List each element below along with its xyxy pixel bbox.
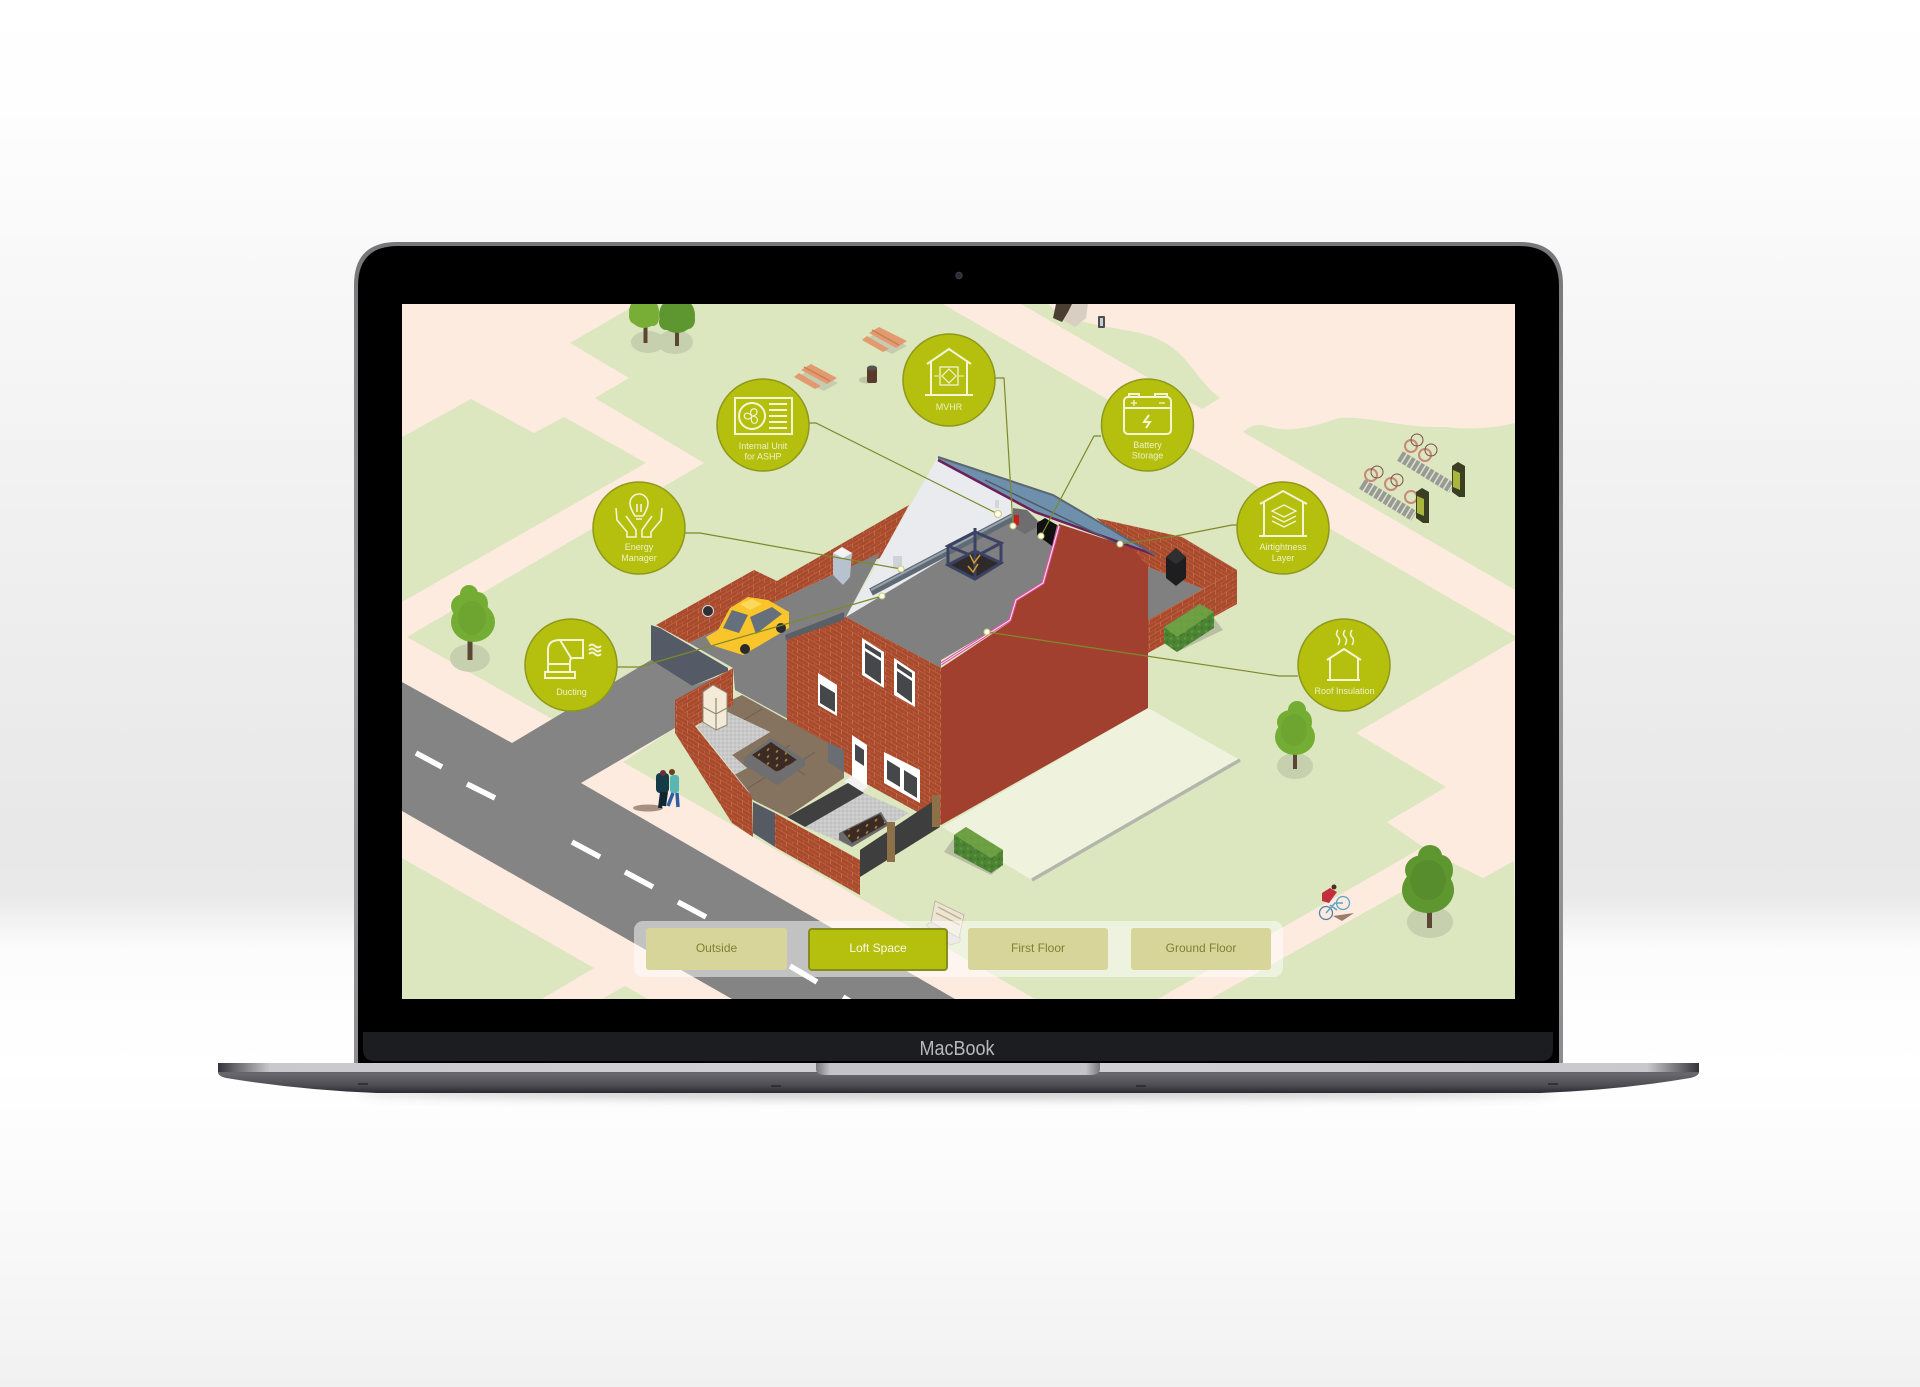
ground floor window (884, 752, 920, 803)
sliding gate (651, 625, 728, 686)
tree: top left (629, 304, 660, 353)
icon: battery (1124, 394, 1171, 434)
button: Ground Floor: Ground Floor (1166, 941, 1236, 955)
label: Internal Unit: Internal Unit (739, 441, 788, 451)
timber fence (860, 795, 940, 877)
menu backdrop (634, 921, 1283, 977)
picnic table 2 (862, 327, 907, 354)
laptop (218, 242, 1699, 1099)
road dashes (416, 753, 851, 1002)
label: Battery: Battery (1133, 440, 1162, 450)
label: Roof Insulation: Roof Insulation (1314, 686, 1375, 696)
rear driveway wall (656, 505, 909, 643)
MVHR frame (948, 528, 1001, 579)
app screen (402, 296, 1515, 1002)
button: Loft Space: Loft Space (849, 941, 907, 955)
side wall (941, 524, 1148, 825)
laptop base shadow (358, 1087, 1558, 1099)
front door (844, 735, 868, 793)
callout: Energy Manager (593, 482, 685, 574)
callout: Airtightness Layer (1237, 482, 1329, 574)
tree: left (450, 585, 495, 672)
icon: heat pump (735, 398, 792, 434)
webcam (956, 272, 962, 279)
front brick facade (787, 617, 941, 825)
laptop base (218, 1063, 1699, 1093)
green lawns (402, 304, 1515, 999)
road (402, 660, 955, 999)
label: Airtightness: Airtightness (1259, 542, 1307, 552)
MacBook wordmark: MacBook (920, 1038, 995, 1060)
raised bed rear (744, 738, 805, 785)
screen ground (402, 304, 1515, 999)
upper window 1 (862, 638, 884, 688)
tree: centre right (1275, 701, 1315, 779)
pedestrians (633, 769, 679, 812)
tree: top second (659, 304, 695, 354)
door mat (787, 783, 864, 827)
grey roof insulation plane (846, 517, 1058, 668)
right yard slab (1148, 567, 1203, 620)
bike docks front (1362, 466, 1429, 523)
icon: house with heat rising (1327, 630, 1361, 680)
raised bed front (839, 812, 889, 847)
callout: MVHR (903, 334, 995, 426)
button: First Floor (968, 928, 1108, 970)
icon: house with heat exchanger (925, 349, 973, 395)
button: Loft Space (809, 929, 947, 970)
laptop lid (354, 242, 1563, 1063)
icon: duct elbow (545, 640, 601, 678)
concrete pad (942, 708, 1240, 880)
gravel strip (697, 707, 770, 793)
loft wall panel (846, 457, 1013, 617)
seated figure on bench (1053, 304, 1105, 328)
callout: Roof Insulation (1298, 619, 1390, 711)
floor menu (634, 921, 1283, 977)
solar array (938, 457, 1155, 555)
heat pump unit (828, 742, 844, 772)
label: MVHR: MVHR (936, 402, 963, 412)
label: Energy Manager: Energy (625, 542, 654, 552)
label: Layer: Layer (1272, 553, 1294, 563)
cyclist (1320, 884, 1354, 921)
battery tower (1166, 548, 1186, 586)
brick boundary wall front (775, 813, 860, 895)
loft boxes (893, 500, 1057, 568)
right front wall (1148, 570, 1237, 653)
callout: Ducting (525, 619, 617, 711)
icon: hands and bulb (616, 494, 662, 537)
picnic table 1 (794, 364, 838, 391)
garden door (753, 802, 775, 847)
wall-mounted unit (833, 547, 852, 585)
duct run (871, 515, 1013, 592)
right rear wall (1096, 518, 1237, 589)
callout leader lines (617, 378, 1298, 676)
right hedge (1164, 604, 1223, 652)
driveway (689, 553, 880, 720)
callout: Battery Storage (1102, 379, 1194, 471)
callout: Internal Unit for ASHP (717, 379, 809, 471)
front hedge (944, 827, 1003, 875)
button: Ground Floor (1131, 928, 1271, 970)
front gravel (805, 793, 909, 847)
button: Outside: Outside (696, 941, 738, 955)
recycling store (703, 685, 727, 730)
tree: lower right (1402, 845, 1454, 938)
patio paving (717, 695, 844, 817)
button: First Floor: First Floor (1011, 941, 1065, 955)
vent (702, 606, 714, 616)
bezel chin (363, 1032, 1553, 1061)
label: Manager: Manager (621, 553, 657, 563)
icon: house with layers (1259, 491, 1307, 536)
house (651, 457, 1240, 895)
porch canopy (785, 612, 844, 640)
insulation pink line (941, 526, 1059, 664)
bench (926, 901, 964, 945)
side window left (818, 673, 837, 716)
brick boundary wall left (675, 668, 753, 837)
upper window 2 (894, 658, 915, 707)
button: Outside (646, 928, 787, 970)
hotspot markers (879, 510, 1123, 635)
taxi (706, 597, 789, 655)
litter bin (859, 366, 877, 384)
label: Ducting: Ducting (556, 687, 587, 697)
label: Storage: Storage (1132, 450, 1163, 460)
bike docks rear (1400, 434, 1465, 497)
label: for ASHP: for ASHP (744, 452, 782, 462)
